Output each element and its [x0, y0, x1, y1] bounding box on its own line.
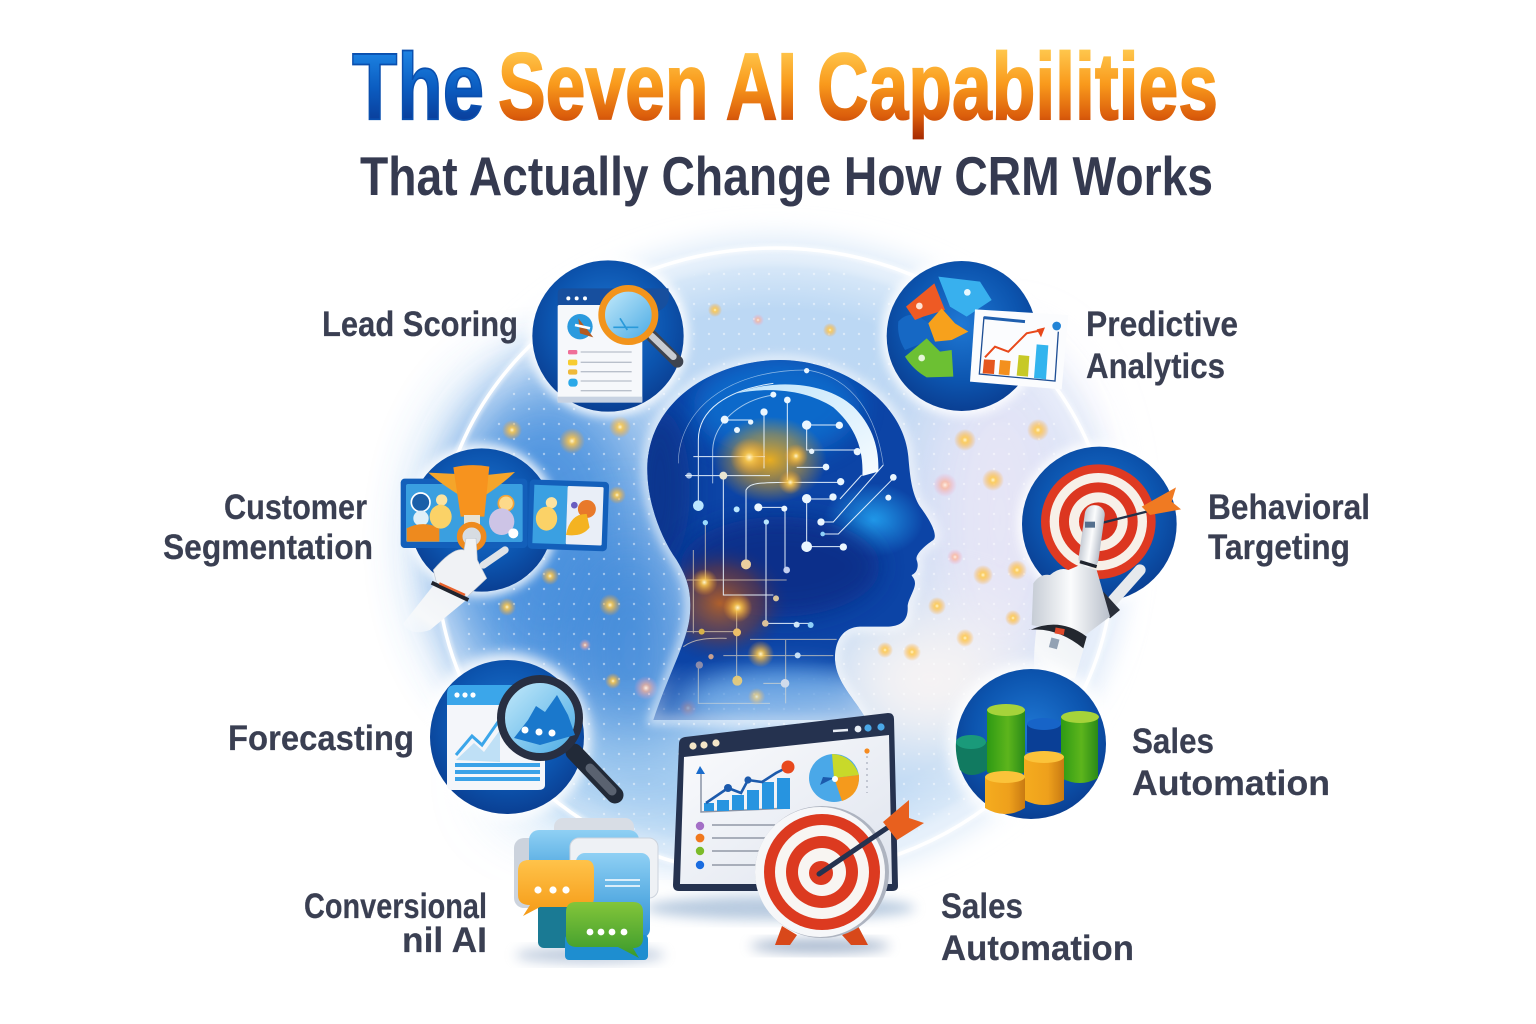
- magnifier: [602, 288, 677, 362]
- orbit ring: [437, 248, 1113, 876]
- label: Sales Automation (right): [1132, 722, 1330, 803]
- label: Sales Automation (bottom): Automation: [941, 929, 1134, 968]
- trophy: [428, 465, 515, 549]
- main title: [352, 34, 1218, 140]
- icon: sales automation cylinders: [948, 662, 1114, 826]
- arrow: [1100, 487, 1181, 523]
- forecast window: [447, 685, 545, 790]
- left panel with people: [401, 479, 527, 548]
- browser document: [558, 288, 669, 403]
- bullseye: [1041, 464, 1156, 579]
- circuit nodes: [686, 368, 897, 688]
- infographic canvas: [164, 50, 1368, 968]
- circuit lines: [678, 370, 893, 703]
- robot hand: [1028, 504, 1140, 680]
- label: Behavioral Targeting: [1208, 488, 1370, 567]
- label: Customer Segmentation: Segmentation: [163, 528, 373, 567]
- label: Conversional nil AI: [304, 887, 487, 960]
- label: Forecasting: Forecasting: [228, 719, 414, 758]
- label: Sales Automation (right): Sales: [1132, 722, 1214, 761]
- label: Conversional nil AI: Conversional: [304, 887, 487, 926]
- label: Conversional nil AI: nil AI: [402, 921, 487, 960]
- magnifier: [501, 679, 615, 795]
- icon: chat bubbles: [514, 818, 665, 963]
- icon: predictive analytics: [881, 256, 1068, 416]
- subtitle: That Actually Change How CRM Works: [360, 145, 1213, 207]
- robot hand: [403, 538, 505, 632]
- title words: Seven AI Capabilities: Seven AI Capabilities: [498, 34, 1218, 140]
- green cylinders: [987, 704, 1099, 783]
- right panel with people: [527, 479, 609, 551]
- label: Predictive Analytics: Analytics: [1086, 347, 1225, 386]
- icon: customer segmentation: [401, 443, 609, 632]
- label: Customer Segmentation: Customer: [224, 488, 367, 527]
- icon: target with arrow: [750, 800, 924, 953]
- pie chart: [809, 748, 870, 802]
- icon: dashboard monitor: [673, 713, 898, 891]
- central AI head: [630, 350, 950, 740]
- orange cylinders: [985, 751, 1064, 814]
- chart card: [970, 309, 1068, 389]
- screen shadow: [645, 896, 915, 920]
- icon: lead scoring: [527, 255, 689, 417]
- label: Sales Automation (bottom): Sales: [941, 887, 1023, 926]
- pie wedges: [898, 277, 992, 377]
- label: Behavioral Targeting: Targeting: [1208, 528, 1350, 567]
- central glow background: [427, 238, 1123, 882]
- orange speech bubble: [518, 860, 594, 916]
- label: Predictive Analytics: Predictive: [1086, 305, 1238, 344]
- glowing orange nodes: [691, 438, 808, 705]
- head glow edge: [647, 360, 935, 720]
- label: Customer Segmentation: [163, 488, 373, 567]
- label: Behavioral Targeting: Behavioral: [1208, 488, 1370, 527]
- label: Sales Automation (bottom): [941, 887, 1134, 968]
- green speech bubble: [566, 902, 643, 958]
- icon: behavioral targeting: [1017, 442, 1181, 680]
- title word: The: The: [352, 34, 484, 140]
- label: Sales Automation (right): Automation: [1132, 764, 1330, 803]
- swoosh highlight: [737, 384, 878, 476]
- icon: forecasting: [423, 653, 615, 821]
- scattered light particles: [498, 303, 1049, 717]
- head silhouette: [647, 360, 935, 720]
- list rows: [696, 822, 775, 869]
- line and bar chart: [696, 760, 794, 812]
- label: Predictive Analytics: [1086, 305, 1238, 386]
- label: Lead Scoring: Lead Scoring: [322, 305, 518, 344]
